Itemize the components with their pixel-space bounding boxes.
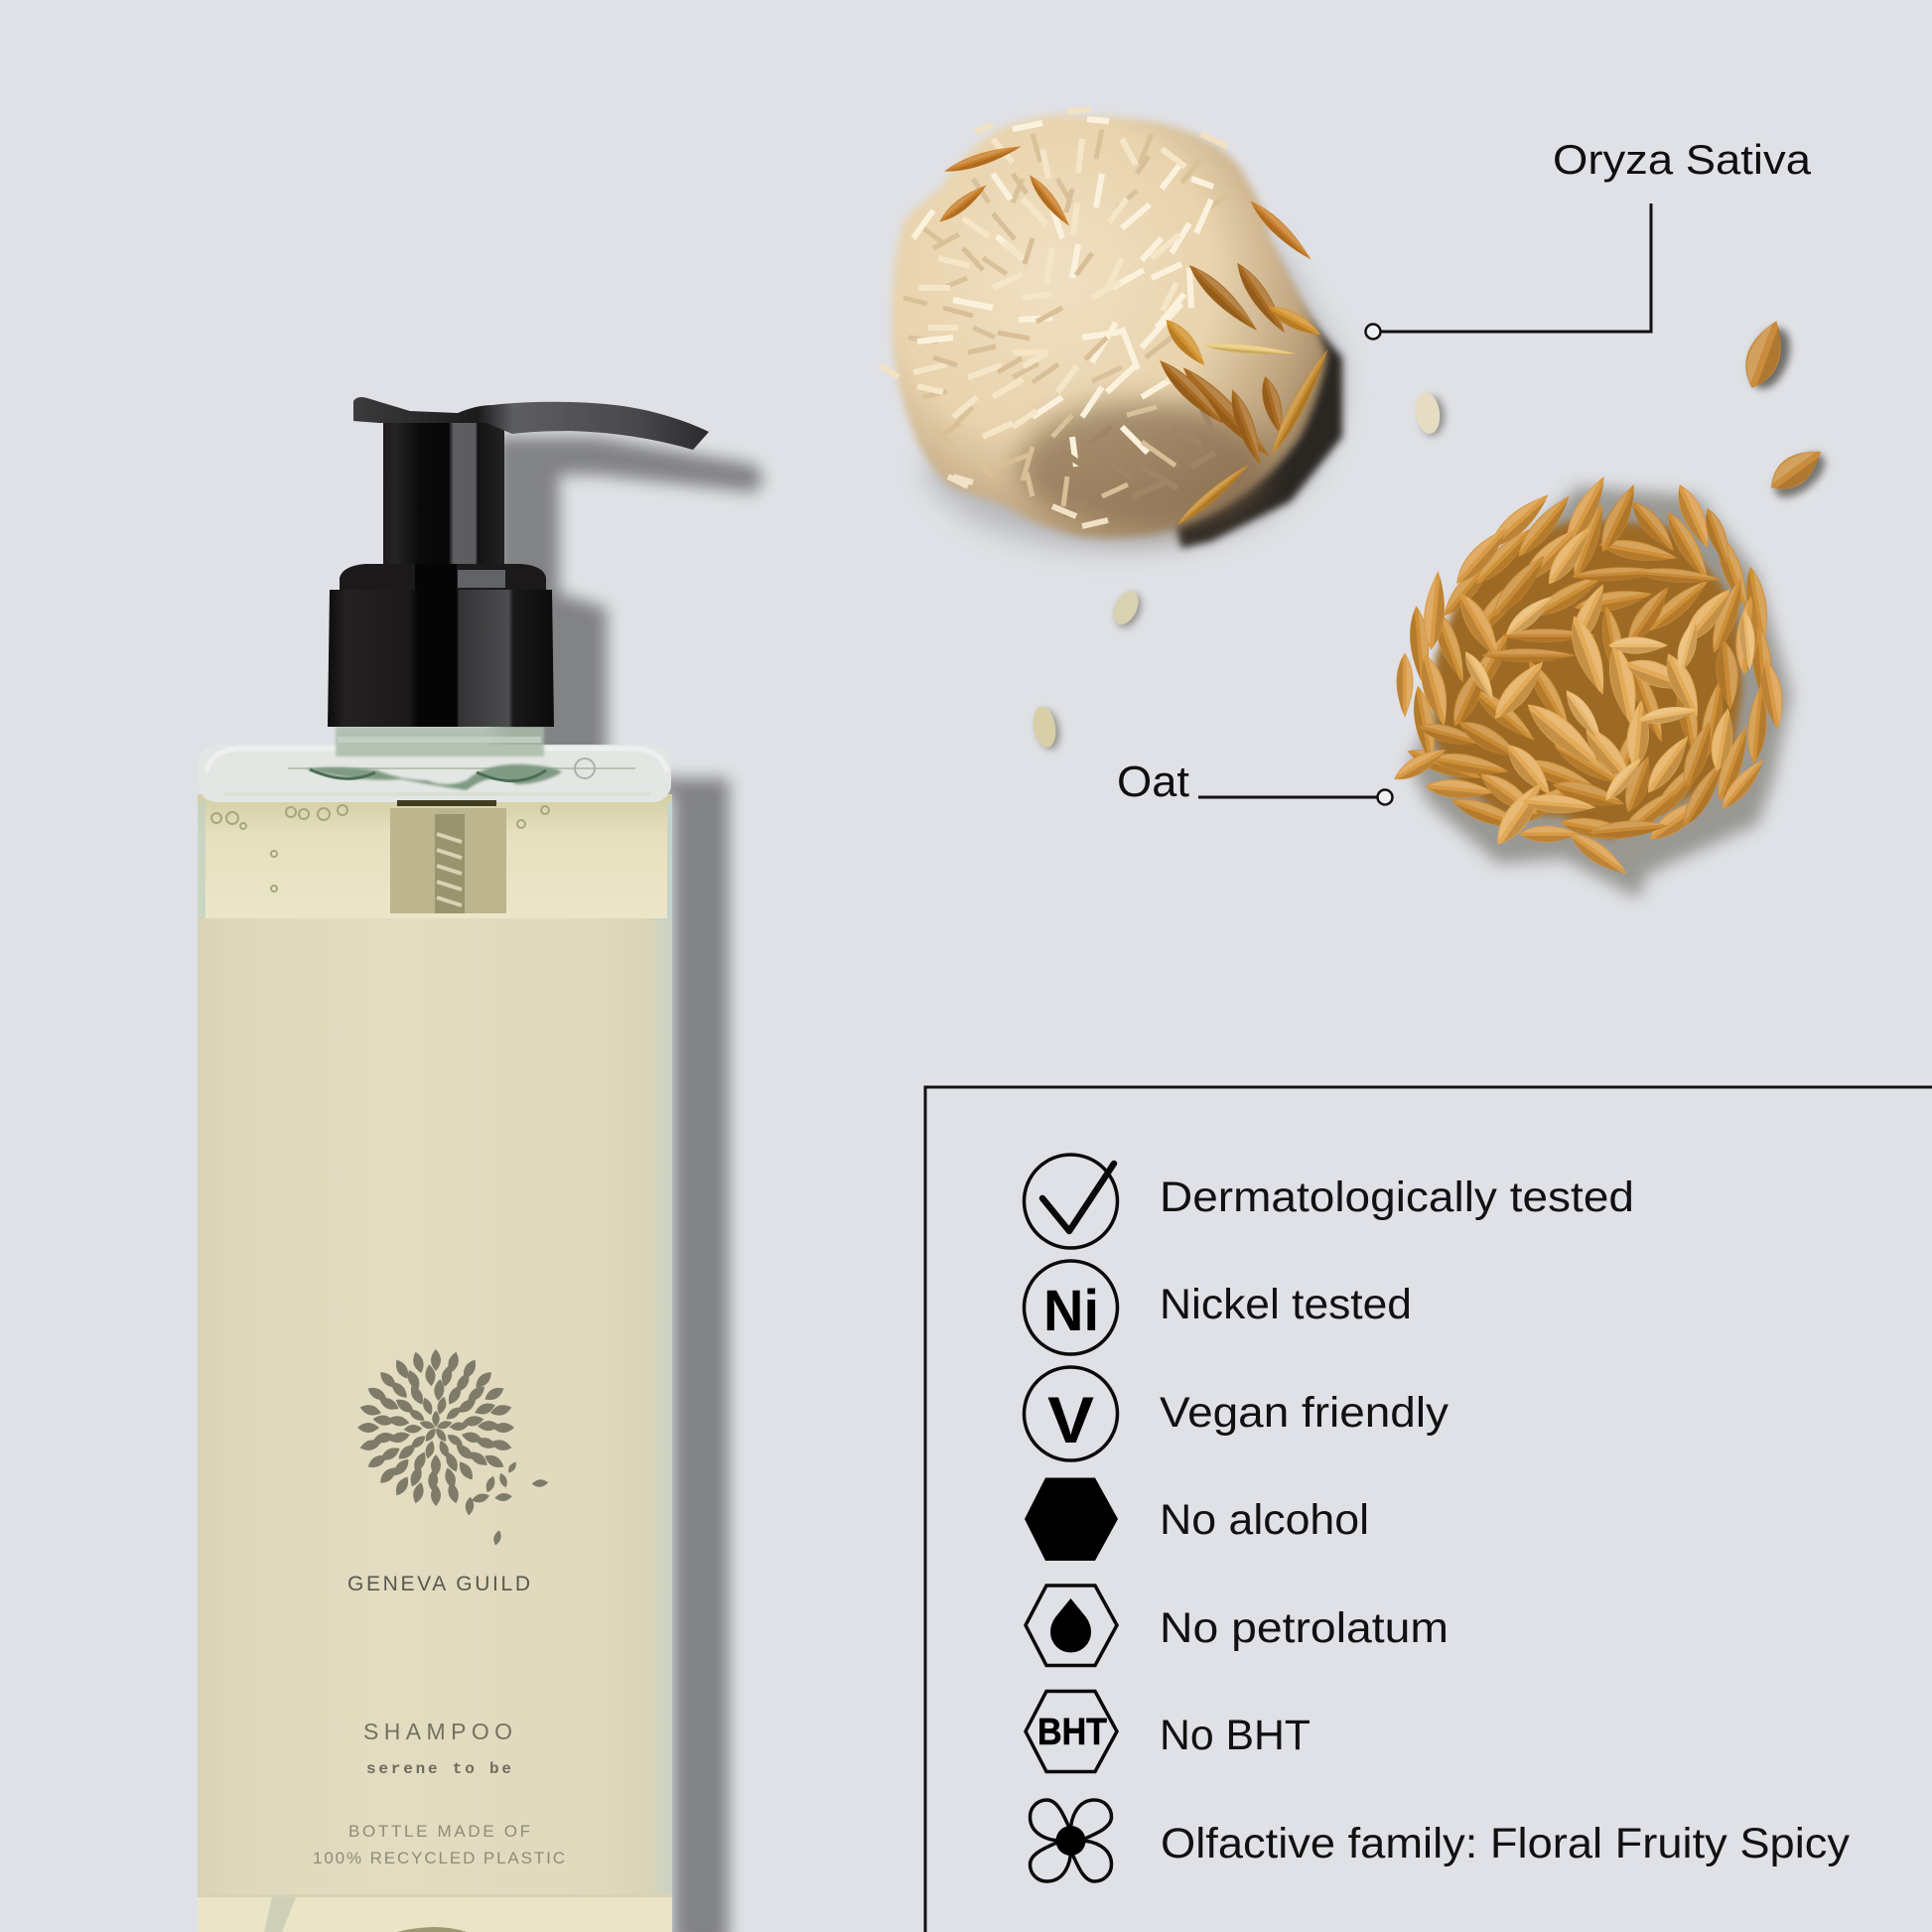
loose rice grains [1031, 391, 1445, 752]
icon: no alcohol hexagon [1025, 1477, 1118, 1561]
right glass edge [667, 802, 672, 1932]
icon: no BHT: BHT [1037, 1712, 1107, 1753]
dip tube [390, 803, 506, 913]
oat base [1435, 521, 1742, 839]
label panel [198, 918, 672, 1896]
leader dot [1366, 324, 1380, 340]
rice soft shadow [923, 238, 1341, 549]
leader line to oat [1198, 796, 1377, 798]
claim: no alcohol: No alcohol [1160, 1496, 1369, 1544]
leader dot [1378, 790, 1392, 804]
icon: vegan [1025, 1367, 1118, 1460]
bottle liquid body [198, 794, 672, 1932]
icon: flower [1031, 1800, 1112, 1881]
pump spout [353, 397, 709, 450]
pump [328, 397, 709, 727]
flower logo [357, 1349, 549, 1546]
claims panel [925, 1087, 1932, 1932]
oat shadow [1410, 486, 1791, 898]
rice mound [892, 115, 1327, 537]
recycled note: BOTTLE MADE OF [348, 1822, 530, 1841]
bottle cast shadow [496, 437, 762, 1932]
icon: nickel [1025, 1261, 1118, 1354]
oat pile [1390, 472, 1791, 898]
recycled note: 100% RECYCLED PLASTIC [313, 1849, 565, 1867]
rice husks [936, 141, 1333, 529]
icon: no petrolatum [1026, 1586, 1117, 1666]
claim: vegan friendly: Vegan friendly [1160, 1389, 1449, 1437]
callout: Oat [1117, 758, 1392, 806]
icon: nickel: Ni [1043, 1279, 1099, 1343]
claim: nickel tested: Nickel tested [1160, 1281, 1412, 1328]
leader line to rice [1381, 204, 1651, 332]
recycled note [313, 1822, 565, 1867]
product name: SHAMPOO [363, 1719, 512, 1744]
brand name: GENEVA GUILD [347, 1573, 530, 1595]
icon: vegan: V [1047, 1383, 1094, 1456]
callout: Oryza Sativa [1366, 136, 1812, 340]
rice dark shadow [1172, 298, 1342, 548]
claim: olfactive family: Olfactive family: Floral Fruity Spicy [1161, 1820, 1851, 1867]
liquid fill line [212, 798, 667, 802]
oat grains [1390, 472, 1788, 882]
icon: dermatologically tested [1025, 1155, 1118, 1248]
loose oat grains [1737, 316, 1833, 505]
lower bottle detail [198, 1894, 672, 1932]
shampoo bottle [198, 397, 709, 1932]
claim: no petrolatum: No petrolatum [1160, 1604, 1449, 1652]
rice pile [881, 109, 1342, 549]
bubbles [211, 805, 549, 892]
label: Oat: Oat [1117, 758, 1189, 806]
rice lower shade [1018, 402, 1266, 531]
pump collar [328, 564, 554, 727]
claim: no BHT: No BHT [1160, 1712, 1311, 1759]
left glass edge [198, 802, 206, 1932]
panel frame [925, 1087, 1932, 1932]
glass shoulder [199, 745, 671, 802]
icon: no BHT [1026, 1692, 1117, 1771]
label: Oryza Sativa: Oryza Sativa [1553, 136, 1812, 183]
pump stem [383, 422, 504, 566]
rice grains [881, 109, 1236, 526]
tagline: serene to be [366, 1760, 511, 1778]
green glass neck [306, 727, 562, 790]
claim: dermatologically tested: Dermatologically tested [1160, 1173, 1634, 1221]
